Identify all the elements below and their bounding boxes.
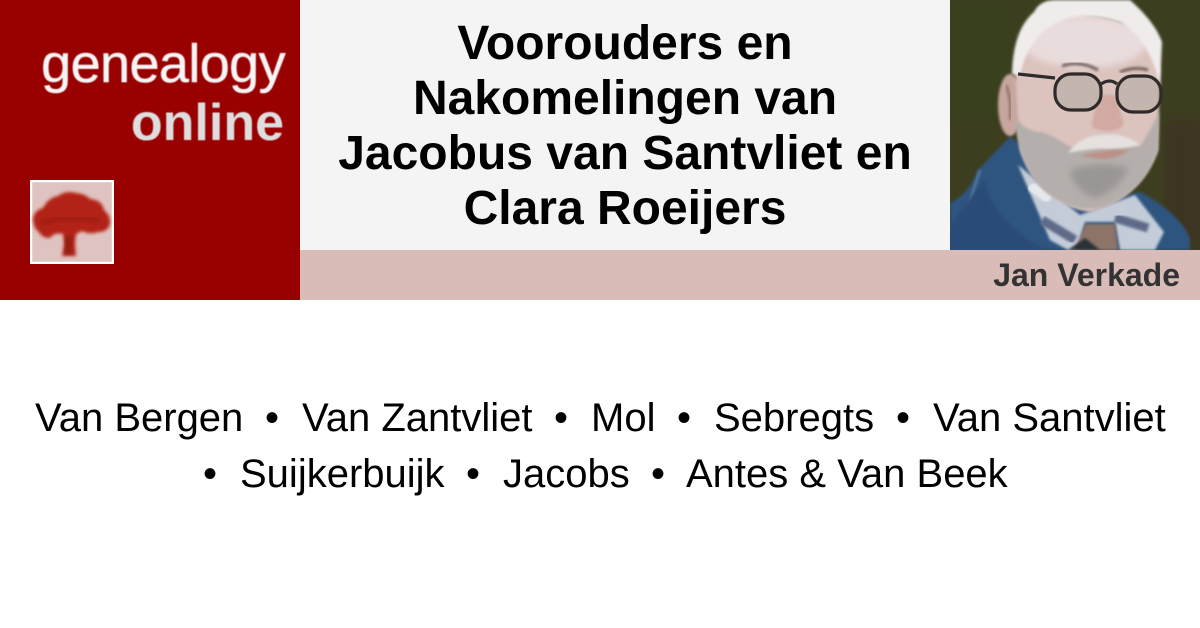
family names list: •	[677, 396, 691, 440]
forehead highlight	[1023, 16, 1147, 68]
beard	[1016, 112, 1159, 209]
title: Nakomelingen van	[413, 72, 837, 125]
family names list: •	[651, 452, 665, 496]
hair	[1012, 0, 1162, 88]
title: Jacobus van Santvliet en	[338, 127, 912, 180]
family names list: •	[896, 396, 910, 440]
glasses	[1018, 74, 1161, 112]
panel: title background	[300, 0, 950, 250]
panel: logo	[0, 0, 300, 300]
family names list: •	[554, 396, 568, 440]
family names list: Van Bergen	[35, 396, 243, 440]
coat	[950, 137, 1190, 250]
photo: author portrait	[950, 0, 1200, 250]
shirt collar	[1018, 165, 1164, 250]
face	[1015, 15, 1160, 212]
nose	[1092, 95, 1124, 131]
title	[338, 17, 912, 235]
family names list: Mol	[591, 396, 655, 440]
family names list: Antes & Van Beek	[686, 452, 1008, 496]
family names list: •	[265, 396, 279, 440]
author bar	[300, 250, 1200, 300]
title: Clara Roeijers	[464, 182, 786, 235]
logo word: genealogy: genealogy	[41, 34, 285, 94]
moustache	[1068, 134, 1140, 153]
author name: Jan Verkade	[993, 257, 1180, 293]
family names list: Suijkerbuijk	[240, 452, 445, 496]
eyebrows	[1062, 64, 1148, 72]
family names list	[35, 396, 1166, 496]
family names list: Van Zantvliet	[302, 396, 532, 440]
family names list: Jacobs	[503, 452, 630, 496]
ear	[998, 74, 1022, 136]
family names list: Sebregts	[714, 396, 874, 440]
family names list: •	[466, 452, 480, 496]
logo word: online: online	[131, 94, 284, 152]
family names list: Van Santvliet	[933, 396, 1166, 440]
title: Voorouders en	[457, 17, 793, 70]
icon: tree	[30, 180, 114, 264]
family names list: •	[203, 452, 217, 496]
